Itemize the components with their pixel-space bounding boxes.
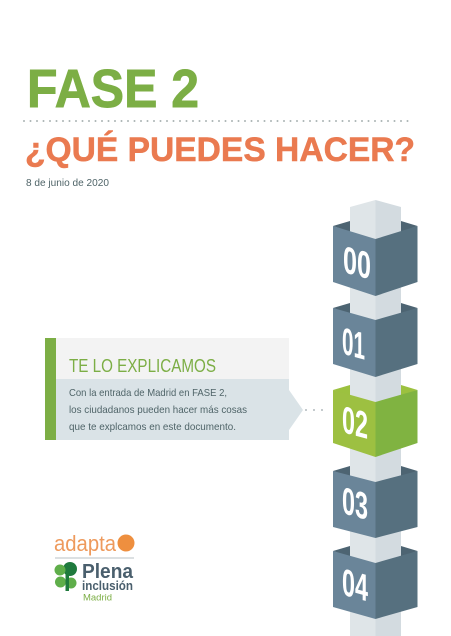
panel heading: TE LO EXPLICAMOS	[69, 356, 216, 376]
logo: Plena inclusión Madrid: inclusión	[82, 579, 133, 593]
cube 04	[333, 546, 418, 619]
icon: clover	[54, 562, 77, 591]
cube 00: 00	[343, 239, 371, 288]
column of numbered cubes	[333, 200, 418, 636]
panel text: que te explcamos en este documento.	[69, 421, 236, 433]
logo: Plena inclusión Madrid	[54, 561, 134, 602]
cube 02, highlighted	[333, 385, 418, 457]
logos	[54, 531, 134, 602]
date: 8 de junio de 2020	[26, 178, 109, 189]
cube 03: 03	[342, 480, 368, 529]
logo: Plena inclusión Madrid: Plena	[82, 561, 134, 583]
panel: te lo explicamos	[45, 338, 323, 440]
subtitle: ¿Qué puedes hacer?: ¿QUÉ PUEDES HACER?	[25, 131, 415, 169]
logo: adapta: adapta	[54, 531, 117, 556]
logo: Plena inclusión Madrid: Madrid	[83, 592, 112, 602]
dotted connector	[306, 409, 323, 411]
cube 01: 01	[342, 320, 365, 369]
title: FASE 2: FASE 2	[27, 59, 199, 119]
pillar	[350, 200, 401, 636]
cube 04: 04	[342, 561, 368, 610]
cube 03	[333, 466, 418, 538]
cube 02, highlighted: 02	[342, 399, 368, 448]
panel text: Con la entrada de Madrid en FASE 2,	[69, 387, 227, 399]
panel text: los ciudadanos pueden hacer más cosas	[69, 404, 247, 416]
cube 01	[333, 303, 418, 377]
cube 00	[333, 221, 418, 296]
panel text	[69, 387, 247, 433]
